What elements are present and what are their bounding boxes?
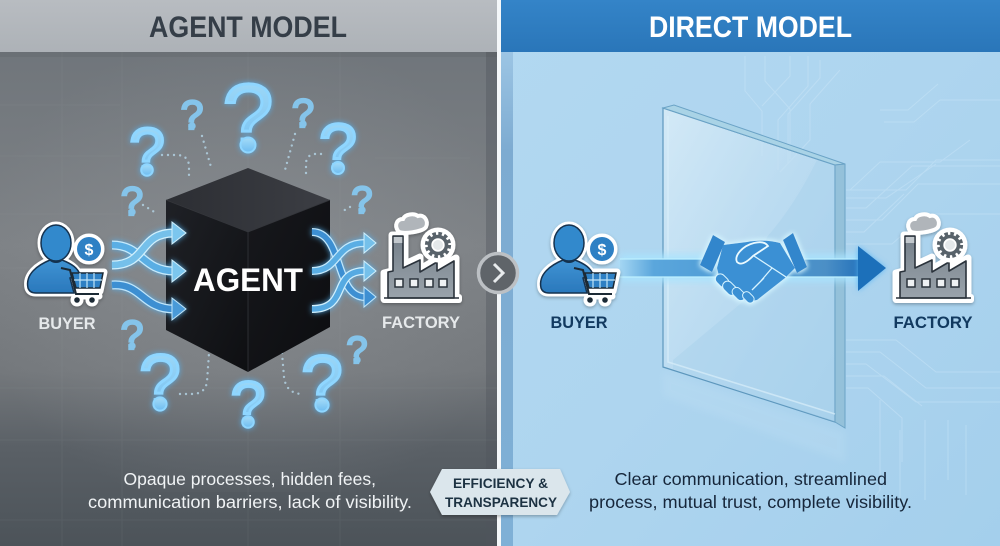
panel: direct model <box>501 0 1000 546</box>
icon: factory <box>893 214 974 303</box>
caption: agent drawbacks <box>88 469 412 512</box>
icon: glass pane <box>663 105 845 428</box>
heading: agent model <box>0 0 497 52</box>
badge: efficiency and transparency: TRANSPARENCY <box>445 494 558 510</box>
badge: efficiency and transparency: EFFICIENCY & <box>453 475 548 491</box>
caption: agent drawbacks: communication barriers, lack of visibility. <box>88 492 412 512</box>
icon: buyer <box>28 225 104 303</box>
heading: direct model: DIRECT MODEL <box>649 11 852 44</box>
question marks: ? <box>346 330 368 372</box>
question marks: ? <box>292 92 314 136</box>
question marks: ? <box>231 370 265 439</box>
label: factory: FACTORY <box>894 314 973 332</box>
label: buyer: BUYER <box>550 314 608 332</box>
label: factory: FACTORY <box>382 314 460 332</box>
question marks: ? <box>139 339 181 423</box>
divider <box>497 0 501 546</box>
caption: direct benefits <box>589 469 912 512</box>
caption: direct benefits: Clear communication, streamlined <box>614 469 887 489</box>
glass floor reflection <box>663 372 845 462</box>
heading: direct model <box>501 0 1000 52</box>
question marks: ? <box>222 66 274 168</box>
label: buyer: BUYER <box>38 315 96 333</box>
dotted connectors <box>143 134 350 394</box>
caption: direct benefits: process, mutual trust, complete visibility. <box>589 492 912 512</box>
heading: agent model: AGENT MODEL <box>149 11 347 44</box>
question marks: ? <box>181 92 203 138</box>
icon: handshake <box>700 233 807 305</box>
icon: factory <box>381 214 462 303</box>
question marks <box>121 66 373 439</box>
question marks: ? <box>351 180 373 222</box>
question marks: ? <box>129 115 165 187</box>
decorative circuit traces <box>745 56 1000 506</box>
question marks: ? <box>121 312 143 358</box>
label: agent: AGENT <box>193 262 303 298</box>
question marks: ? <box>121 180 143 224</box>
question marks: ? <box>319 110 357 186</box>
badge: efficiency and transparency <box>430 469 570 515</box>
arrow: direct beam <box>620 246 886 291</box>
icon: black box agent <box>166 168 330 372</box>
question marks: ? <box>301 340 343 424</box>
panel: agent model <box>0 0 497 546</box>
arrows: buyer to agent <box>112 222 186 320</box>
icon: chevron button <box>478 254 518 292</box>
icon: buyer <box>541 225 617 303</box>
caption: agent drawbacks: Opaque processes, hidden fees, <box>124 469 376 489</box>
arrows: agent to factory <box>312 232 376 309</box>
